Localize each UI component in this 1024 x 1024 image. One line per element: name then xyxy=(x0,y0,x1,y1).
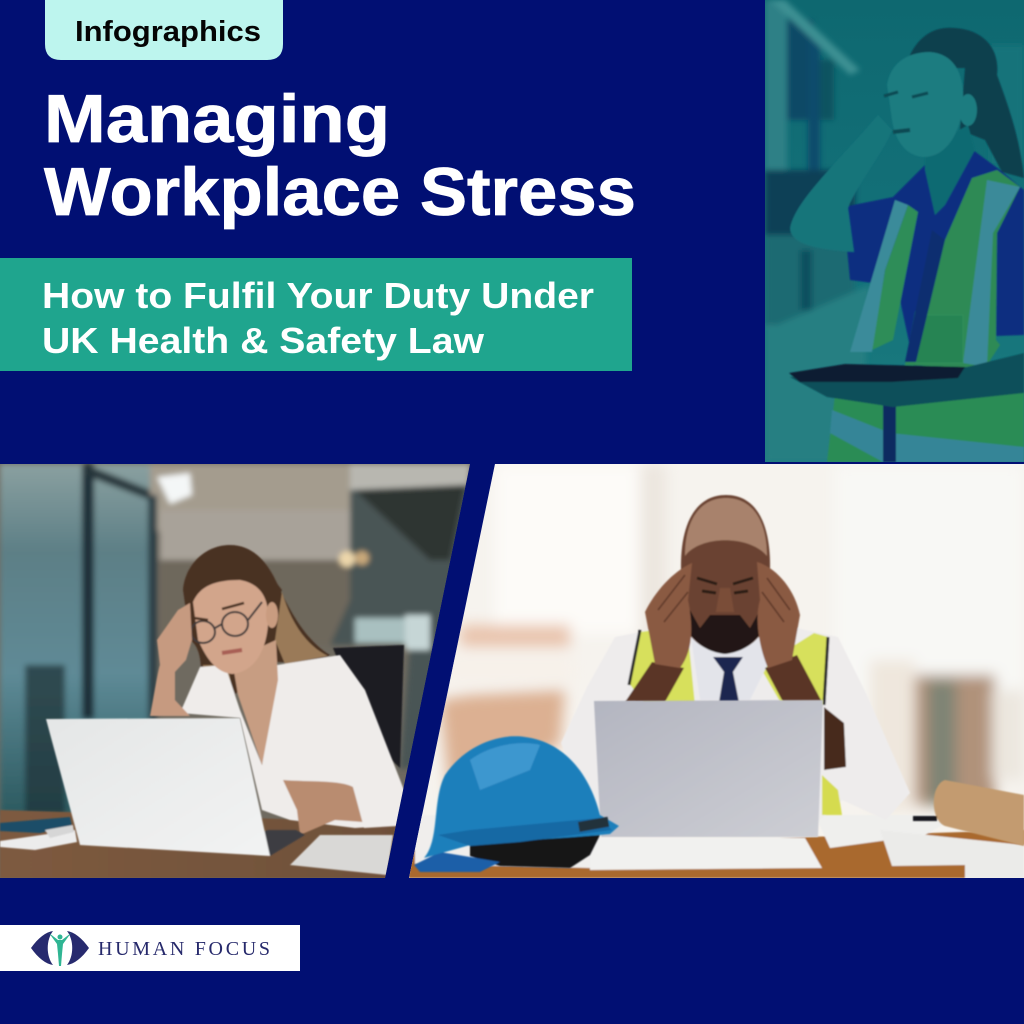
woman figure xyxy=(150,545,404,835)
chair xyxy=(333,645,404,768)
title: Workplace Stress xyxy=(44,154,636,230)
laptop xyxy=(594,700,823,837)
photo: stressed warehouse worker with teal overlay xyxy=(765,0,1024,462)
logo: Human Focus: HUMAN FOCUS xyxy=(98,938,270,960)
subtitle band: How to Fulfil Your Duty Under xyxy=(42,275,594,316)
chip: Infographics: Infographics xyxy=(75,16,261,48)
chip: Infographics xyxy=(45,0,283,60)
icon: eye with figure xyxy=(31,931,89,966)
subtitle band xyxy=(0,258,632,371)
office desk xyxy=(0,809,396,878)
cardboard tube xyxy=(913,780,1024,846)
logo: Human Focus xyxy=(0,925,300,971)
phone and papers xyxy=(0,817,77,850)
worker figure xyxy=(789,28,1024,462)
photo: site manager with laptop and helmet xyxy=(409,464,1024,878)
title: Managing xyxy=(44,81,390,157)
hard hat xyxy=(414,736,619,872)
tablet and paper xyxy=(290,835,393,875)
desk and plans xyxy=(409,815,1024,878)
man figure xyxy=(561,495,910,820)
subtitle band: UK Health & Safety Law xyxy=(42,320,485,361)
laptop xyxy=(46,718,305,856)
title xyxy=(44,81,636,230)
photo: woman at laptop in office xyxy=(0,464,470,878)
